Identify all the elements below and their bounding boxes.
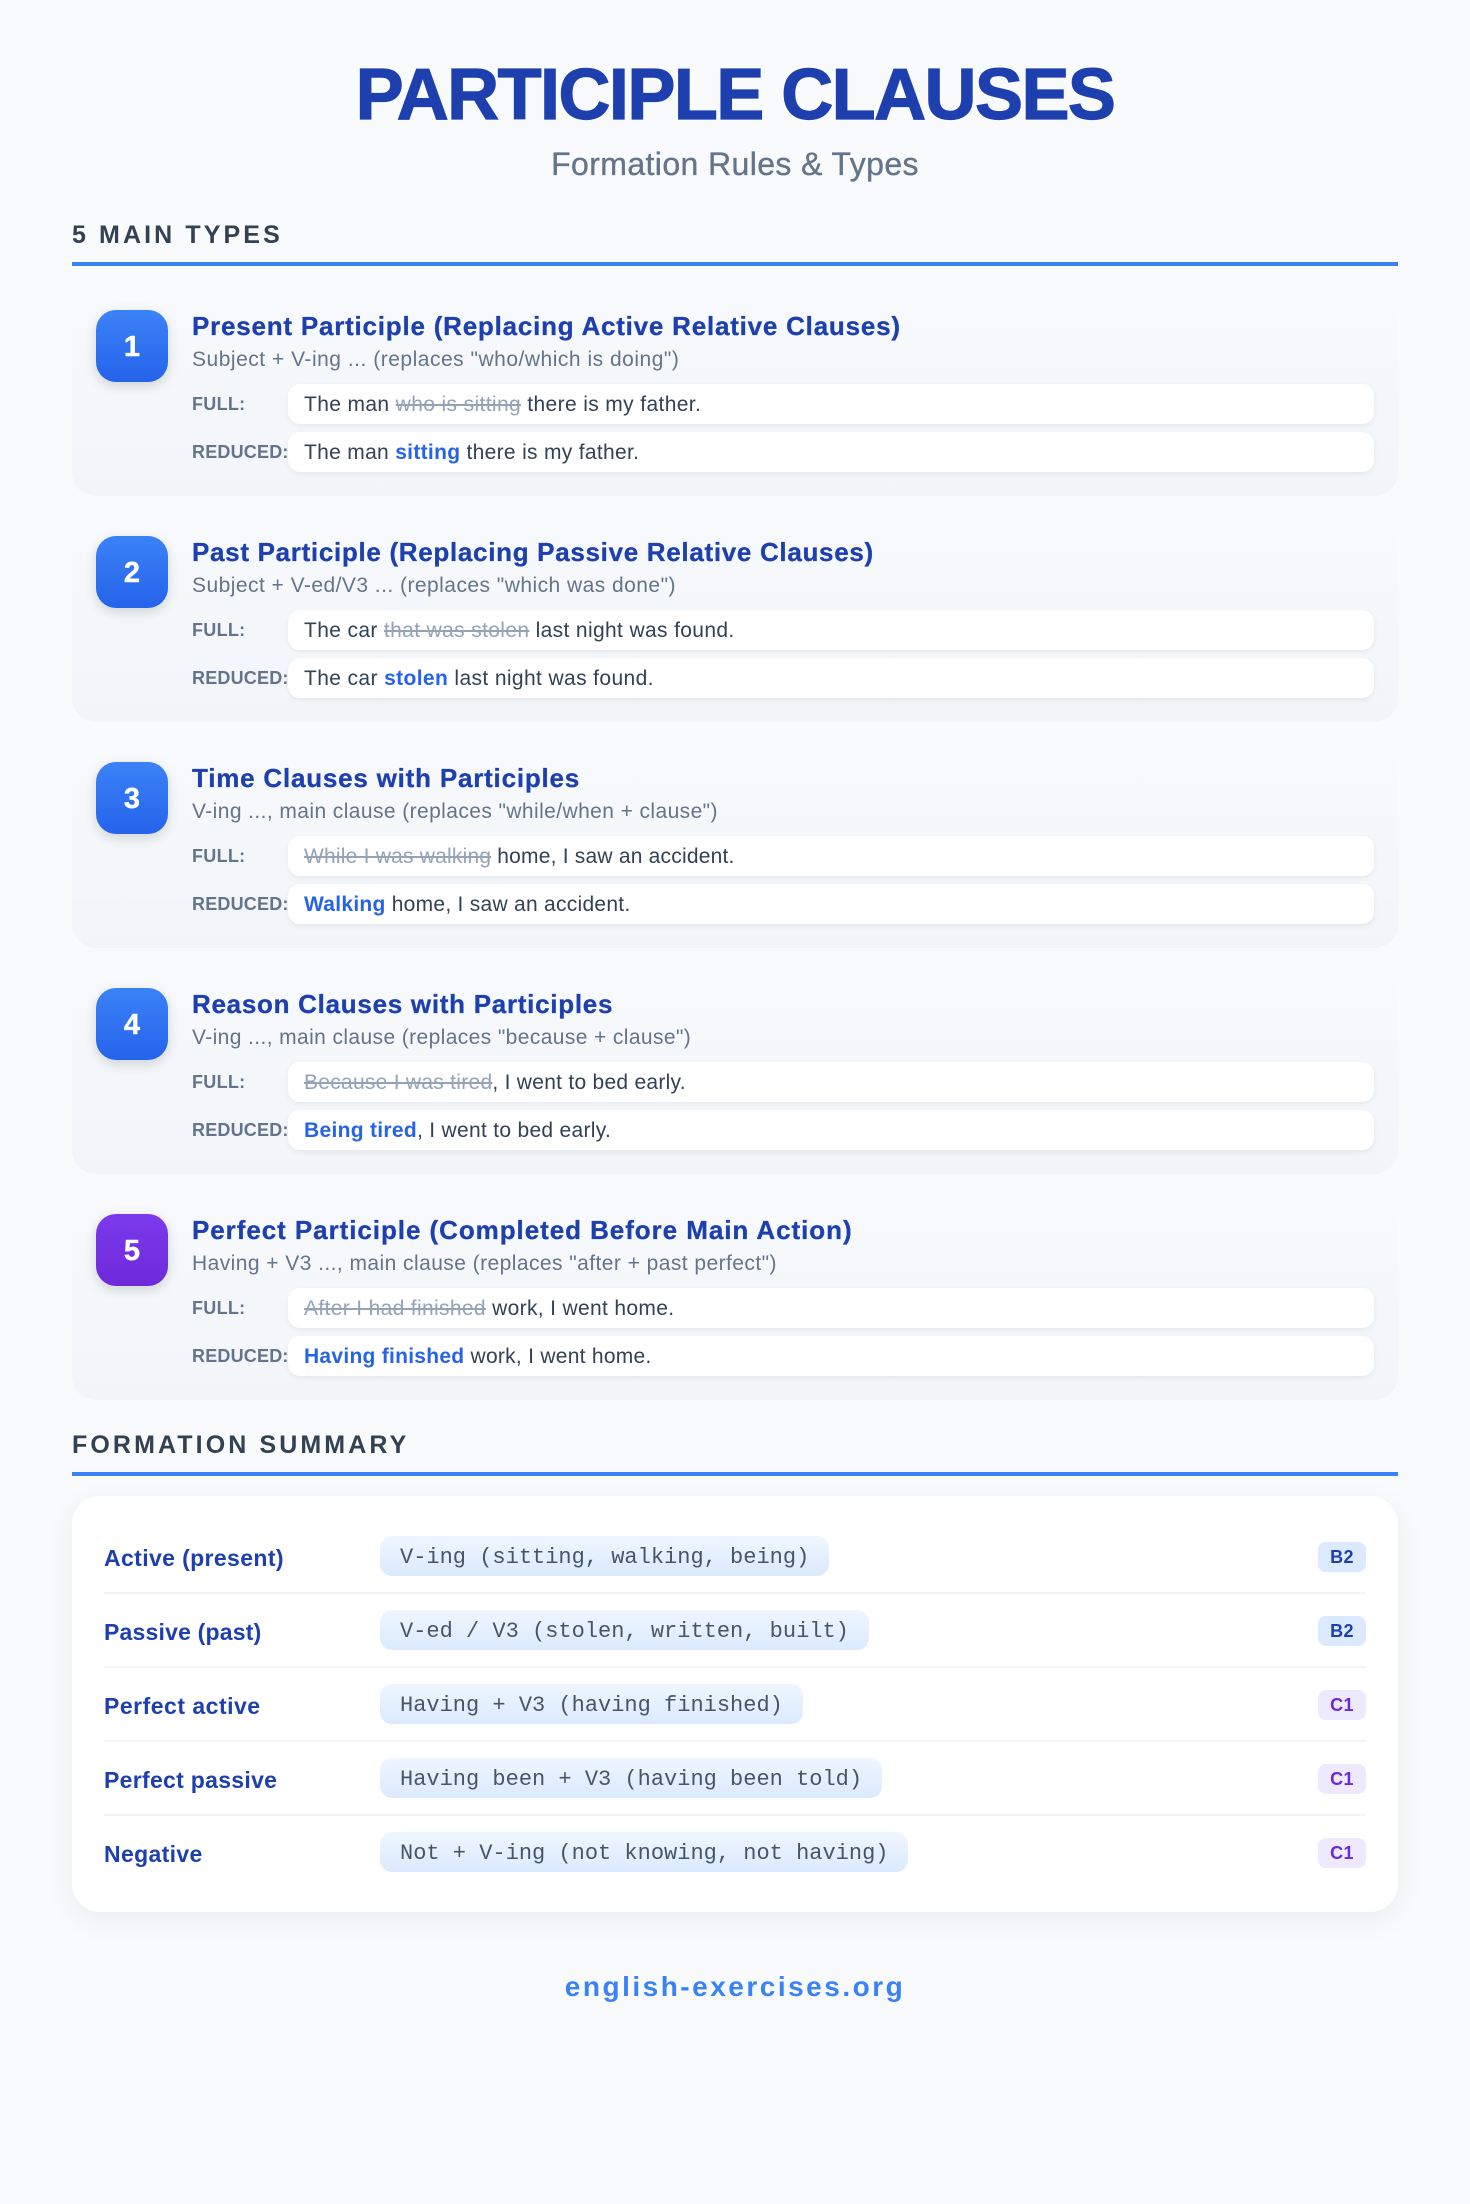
full example: The man who is sitting there is my father. [304, 393, 701, 416]
panel: formation summary table [72, 1496, 1398, 1912]
full label: FULL: [192, 394, 245, 414]
icon: number 4 badge: 4 [124, 1009, 140, 1041]
type 2 heading: Past Participle (Replacing Passive Relative Clauses) [192, 537, 874, 567]
full example [288, 384, 1374, 424]
reduced label: REDUCED: [192, 668, 289, 688]
reduced label: REDUCED: [192, 1120, 289, 1140]
level badge: C1 [1318, 1838, 1366, 1868]
full example: After I had finished work, I went home. [304, 1297, 674, 1320]
reduced example [288, 1110, 1374, 1150]
full example [288, 1062, 1374, 1102]
reduced example [288, 432, 1374, 472]
full example [288, 836, 1374, 876]
formula: active [380, 1536, 829, 1576]
level badge: B2: B2 [1330, 1621, 1354, 1641]
icon: number 5 badge: 5 [124, 1235, 140, 1267]
type 2 formula: Subject + V-ed/V3 ... (replaces "which was done") [192, 574, 676, 597]
row label: passive: Passive (past) [104, 1619, 262, 1645]
full example [288, 1288, 1374, 1328]
panel: type 3 time clauses [72, 738, 1398, 948]
type 5 heading: Perfect Participle (Completed Before Main Action) [192, 1215, 853, 1245]
full example: The car that was stolen last night was found. [304, 619, 735, 642]
reduced label: REDUCED: [192, 894, 289, 914]
type 4 heading: Reason Clauses with Participles [192, 989, 613, 1019]
icon: number 1 badge [96, 310, 168, 382]
row label: negative: Negative [104, 1841, 203, 1867]
reduced example: The car stolen last night was found. [304, 667, 654, 690]
type 3 heading: Time Clauses with Participles [192, 763, 580, 793]
icon: number 3 badge: 3 [124, 783, 140, 815]
full label: FULL: [192, 620, 245, 640]
type 5 formula: Having + V3 ..., main clause (replaces "after + past perfect") [192, 1252, 777, 1275]
reduced example: Having finished work, I went home. [304, 1345, 652, 1368]
title: PARTICIPLE CLAUSES [356, 55, 1114, 135]
formula: perfect active [380, 1684, 803, 1724]
type 4 formula: V-ing ..., main clause (replaces "because + clause") [192, 1026, 691, 1049]
panel: type 2 past participle [72, 512, 1398, 722]
icon: number 2 badge: 2 [124, 557, 140, 589]
formula: passive: V-ed / V3 (stolen, written, built) [400, 1619, 849, 1644]
section heading: 5 main types: 5 MAIN TYPES [72, 221, 283, 249]
type 3 formula: V-ing ..., main clause (replaces "while/when + clause") [192, 800, 718, 823]
footer website: english-exercises.org [565, 1971, 905, 2002]
type 1 heading: Present Participle (Replacing Active Relative Clauses) [192, 311, 901, 341]
formula: negative [380, 1832, 908, 1872]
level badge: C1: C1 [1330, 1769, 1354, 1789]
formula: active: V-ing (sitting, walking, being) [400, 1545, 809, 1570]
level badge: B2 [1318, 1616, 1366, 1646]
formula: passive [380, 1610, 869, 1650]
reduced example: The man sitting there is my father. [304, 441, 639, 464]
icon: number 4 badge [96, 988, 168, 1060]
full label: FULL: [192, 1072, 245, 1092]
icon: number 3 badge [96, 762, 168, 834]
level badge: B2: B2 [1330, 1547, 1354, 1567]
reduced example [288, 658, 1374, 698]
full example [288, 610, 1374, 650]
level badge: C1: C1 [1330, 1695, 1354, 1715]
formula: negative: Not + V-ing (not knowing, not having) [400, 1841, 888, 1866]
panel: type 4 reason clauses [72, 964, 1398, 1174]
full example: Because I was tired, I went to bed early. [304, 1071, 686, 1094]
full example: While I was walking home, I saw an accident. [304, 845, 735, 868]
type 1 formula: Subject + V-ing ... (replaces "who/which is doing") [192, 348, 679, 371]
formula: perfect passive [380, 1758, 882, 1798]
full label: FULL: [192, 1298, 245, 1318]
level badge: C1 [1318, 1764, 1366, 1794]
panel: type 5 perfect participle [72, 1190, 1398, 1400]
reduced label: REDUCED: [192, 1346, 289, 1366]
reduced example [288, 884, 1374, 924]
reduced example: Walking home, I saw an accident. [304, 893, 631, 916]
icon: number 1 badge: 1 [124, 331, 140, 363]
formula: perfect active: Having + V3 (having finished) [400, 1693, 783, 1718]
level badge: B2 [1318, 1542, 1366, 1572]
panel: type 1 present participle [72, 286, 1398, 496]
icon: number 5 badge [96, 1214, 168, 1286]
row label: perfect active: Perfect active [104, 1693, 261, 1719]
subtitle: Formation Rules & Types [551, 146, 919, 182]
full label: FULL: [192, 846, 245, 866]
section heading: formation summary: FORMATION SUMMARY [72, 1431, 409, 1459]
reduced example [288, 1336, 1374, 1376]
row label: active: Active (present) [104, 1545, 284, 1571]
level badge: C1 [1318, 1690, 1366, 1720]
row label: perfect passive: Perfect passive [104, 1767, 277, 1793]
reduced label: REDUCED: [192, 442, 289, 462]
formula: perfect passive: Having been + V3 (having been told) [400, 1767, 862, 1792]
icon: number 2 badge [96, 536, 168, 608]
reduced example: Being tired, I went to bed early. [304, 1119, 611, 1142]
level badge: C1: C1 [1330, 1843, 1354, 1863]
